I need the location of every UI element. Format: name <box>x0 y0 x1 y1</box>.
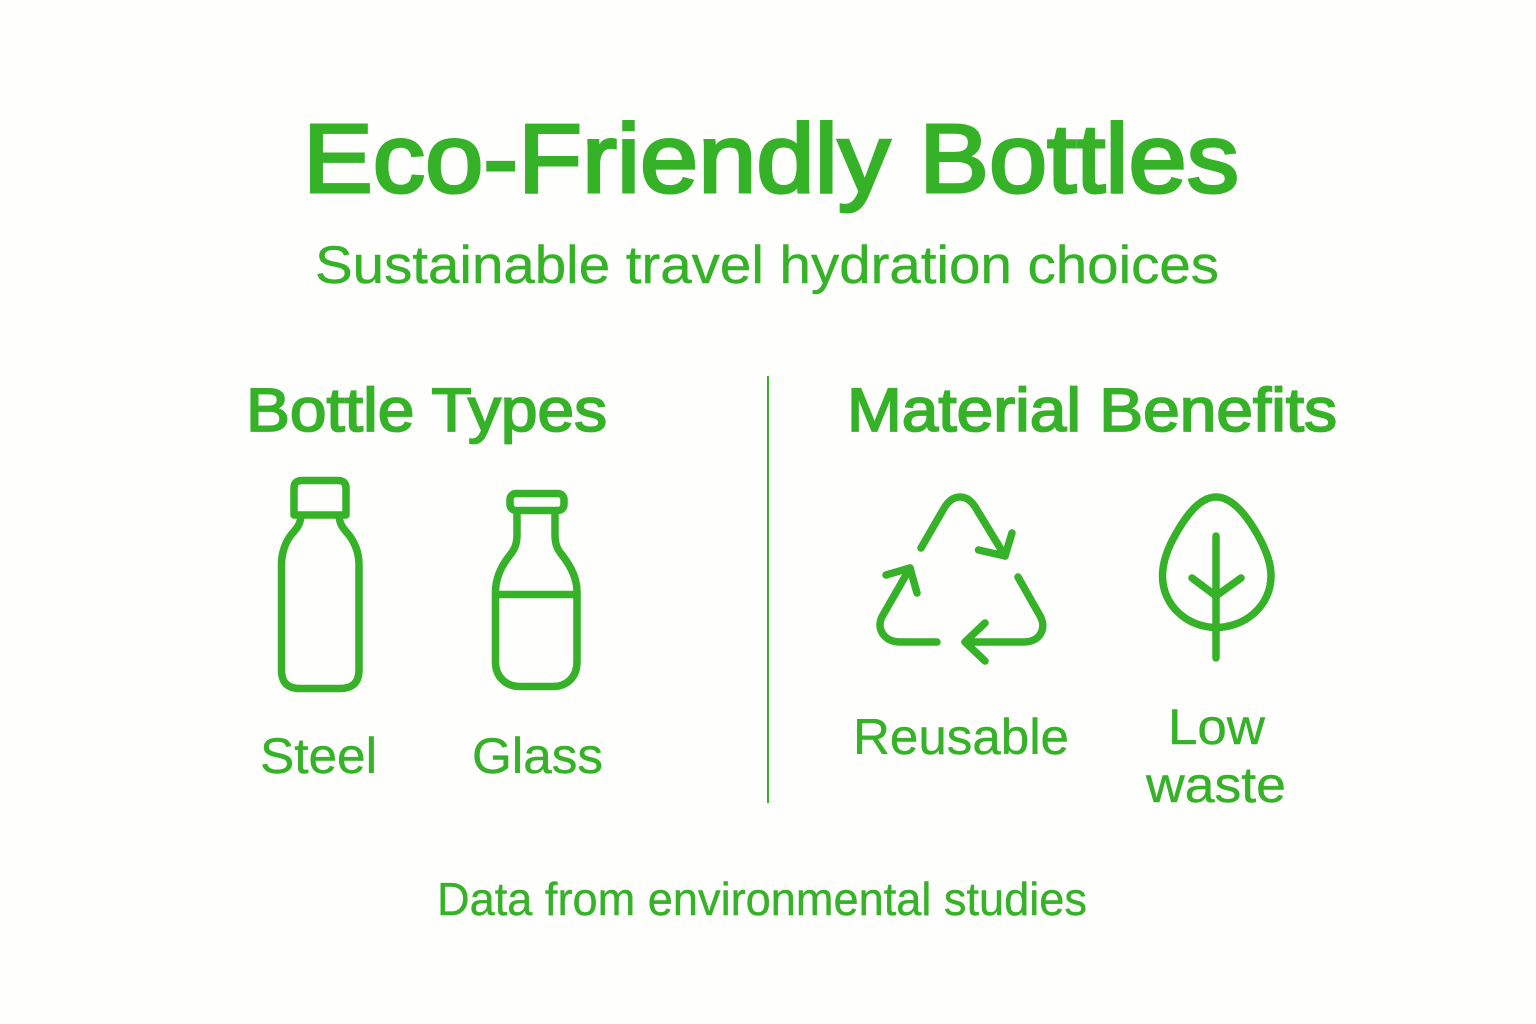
icon: steel bottle <box>282 480 359 688</box>
title: Eco-Friendly Bottles <box>303 104 1239 213</box>
subtitle: Sustainable travel hydration choices <box>315 236 1219 295</box>
label: low waste <box>1145 699 1286 813</box>
label: glass: Glass <box>472 728 603 784</box>
label: steel: Steel <box>260 728 377 784</box>
heading: material benefits: Material Benefits <box>847 376 1337 444</box>
panel: material benefits <box>847 376 1337 813</box>
icon: recycle <box>880 497 1043 661</box>
label: low waste: waste <box>1145 757 1286 813</box>
icon: leaf <box>1162 497 1271 658</box>
label: low waste: Low <box>1168 699 1266 755</box>
icon: glass bottle <box>496 494 577 686</box>
label: reusable: Reusable <box>853 709 1069 765</box>
divider <box>767 376 769 803</box>
heading: bottle types: Bottle Types <box>246 376 607 444</box>
panel: bottle types <box>246 376 607 784</box>
footer source: Data from environmental studies <box>437 873 1087 925</box>
